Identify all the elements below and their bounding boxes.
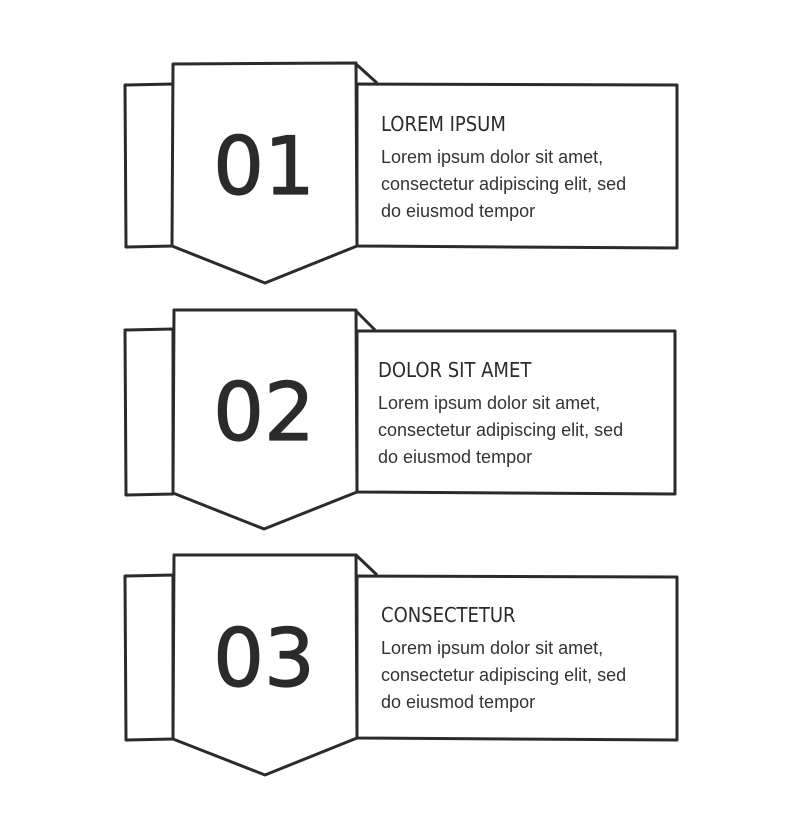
fold 02 bbox=[356, 311, 375, 330]
left tab 01 bbox=[125, 84, 173, 247]
body 01: Lorem ipsum dolor sit amet, bbox=[381, 147, 603, 167]
body 03: do eiusmod tempor bbox=[381, 692, 535, 712]
body 03: Lorem ipsum dolor sit amet, bbox=[381, 638, 603, 658]
body 02: Lorem ipsum dolor sit amet, bbox=[378, 393, 600, 413]
body 02: do eiusmod tempor bbox=[378, 447, 532, 467]
shield 01 bbox=[172, 63, 357, 283]
body 02: consectetur adipiscing elit, sed bbox=[378, 420, 623, 440]
panel: step 03 bbox=[125, 555, 677, 775]
body 01: do eiusmod tempor bbox=[381, 201, 535, 221]
right text box 01 bbox=[357, 84, 677, 248]
number 03: 03 bbox=[213, 612, 315, 705]
left tab 02 bbox=[125, 329, 173, 495]
shield 03 bbox=[173, 555, 357, 775]
number 01: 01 bbox=[213, 120, 315, 213]
panel: step 02 bbox=[125, 310, 675, 529]
heading 02: DOLOR SIT AMET bbox=[378, 358, 532, 382]
left tab 03 bbox=[125, 575, 173, 740]
fold 01 bbox=[356, 64, 377, 83]
fold 03 bbox=[356, 555, 377, 575]
shield 02 bbox=[173, 310, 357, 529]
number 02: 02 bbox=[213, 366, 315, 459]
heading 01: LOREM IPSUM bbox=[381, 112, 506, 136]
panel: step 01 bbox=[125, 63, 677, 283]
body 03: consectetur adipiscing elit, sed bbox=[381, 665, 626, 685]
right text box 03 bbox=[357, 576, 677, 740]
heading 03: CONSECTETUR bbox=[381, 603, 516, 627]
right text box 02 bbox=[357, 331, 675, 494]
body 01: consectetur adipiscing elit, sed bbox=[381, 174, 626, 194]
